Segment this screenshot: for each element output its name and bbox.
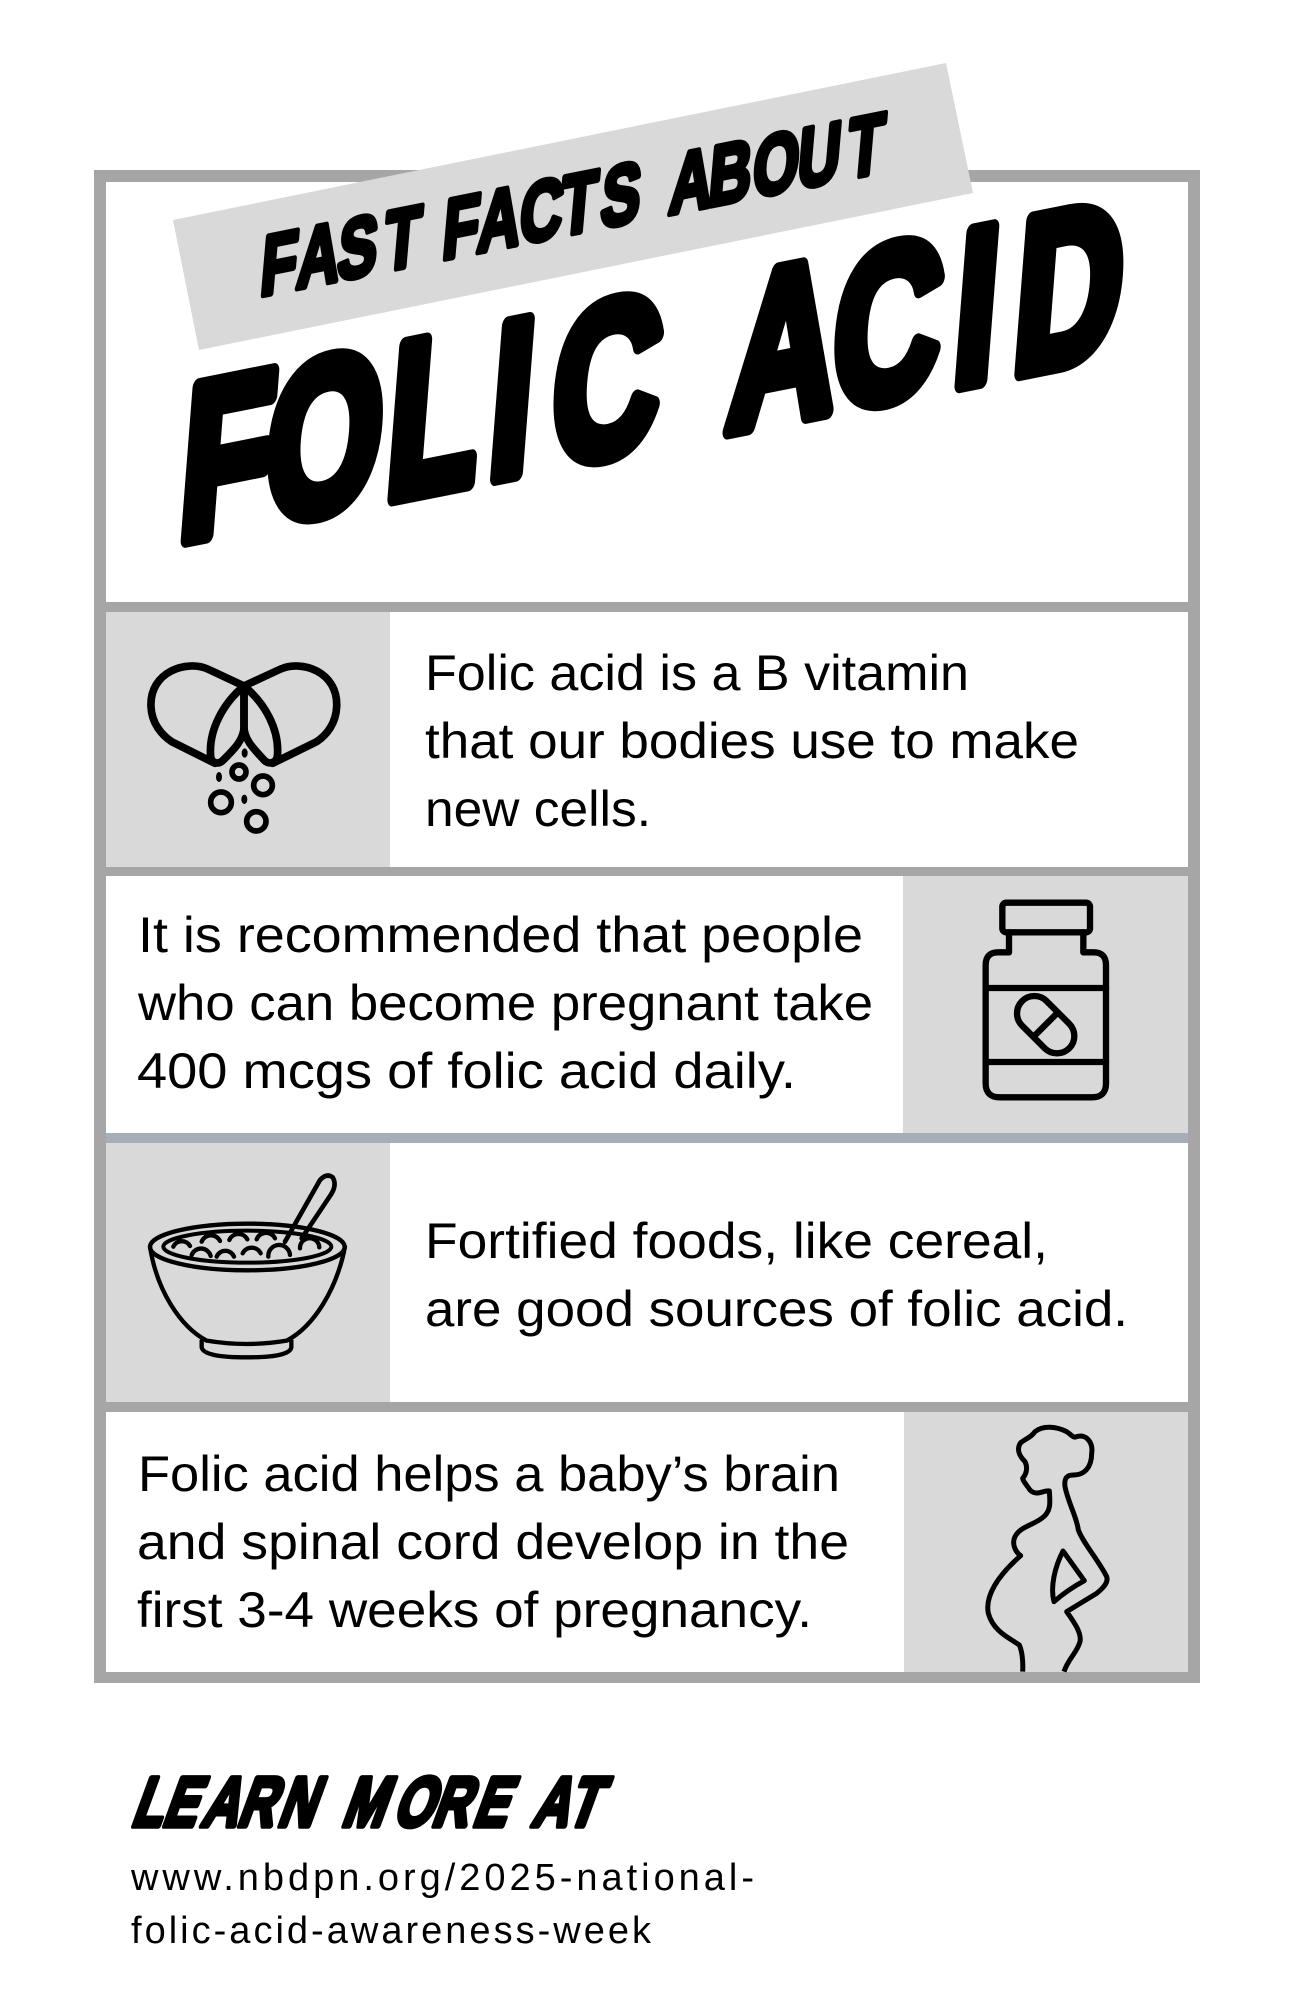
panel: folic acid is a B vitamin <box>106 612 1188 867</box>
text: recommended daily amount: 400 mcgs of folic acid daily. <box>137 1043 796 1099</box>
panel: fortified foods <box>106 1143 1188 1402</box>
link: event url <box>130 1857 754 1952</box>
panel: recommended daily amount <box>106 876 1188 1133</box>
banner: tilted grey strip <box>173 63 973 350</box>
text: fortified foods: are good sources of folic acid. <box>425 1281 1128 1337</box>
text: folic acid is a B vitamin: that our bodies use to make <box>425 713 1079 769</box>
text: baby's brain and spinal cord: Folic acid helps a baby’s brain <box>138 1446 840 1502</box>
text: recommended daily amount: who can become pregnant take <box>137 975 873 1031</box>
text: recommended daily amount: It is recommended that people <box>138 907 863 963</box>
heading: fast facts about: FAST FACTS ABOUT <box>257 94 888 314</box>
heading: learn more at: LEARN MORE AT <box>124 1763 618 1841</box>
text: baby's brain and spinal cord: first 3-4 weeks of pregnancy. <box>137 1582 812 1638</box>
icon: pregnant silhouette <box>988 1427 1107 1672</box>
text: fortified foods: Fortified foods, like cereal, <box>425 1213 1048 1269</box>
text: baby's brain and spinal cord <box>137 1446 849 1638</box>
link: event url: folic-acid-awareness-week <box>131 1910 652 1952</box>
title: folic acid: FOLIC ACID <box>173 154 1133 589</box>
icon: open capsule <box>151 666 337 831</box>
blue-grey divider <box>106 1133 1188 1143</box>
text: baby's brain and spinal cord: and spinal cord develop in the <box>137 1514 849 1570</box>
panel: baby's brain and spinal cord <box>106 1412 1188 1672</box>
text: folic acid is a B vitamin: new cells. <box>425 781 651 837</box>
text: folic acid is a B vitamin <box>425 645 1079 837</box>
outer frame <box>94 170 1200 1683</box>
text: folic acid is a B vitamin: Folic acid is a B vitamin <box>425 645 969 701</box>
text: recommended daily amount <box>137 907 873 1099</box>
icon: pill bottle <box>986 903 1106 1097</box>
icon: cereal bowl with spoon <box>150 1176 345 1357</box>
link: event url: www.nbdpn.org/2025-national- <box>130 1857 754 1899</box>
text: fortified foods <box>425 1213 1128 1337</box>
